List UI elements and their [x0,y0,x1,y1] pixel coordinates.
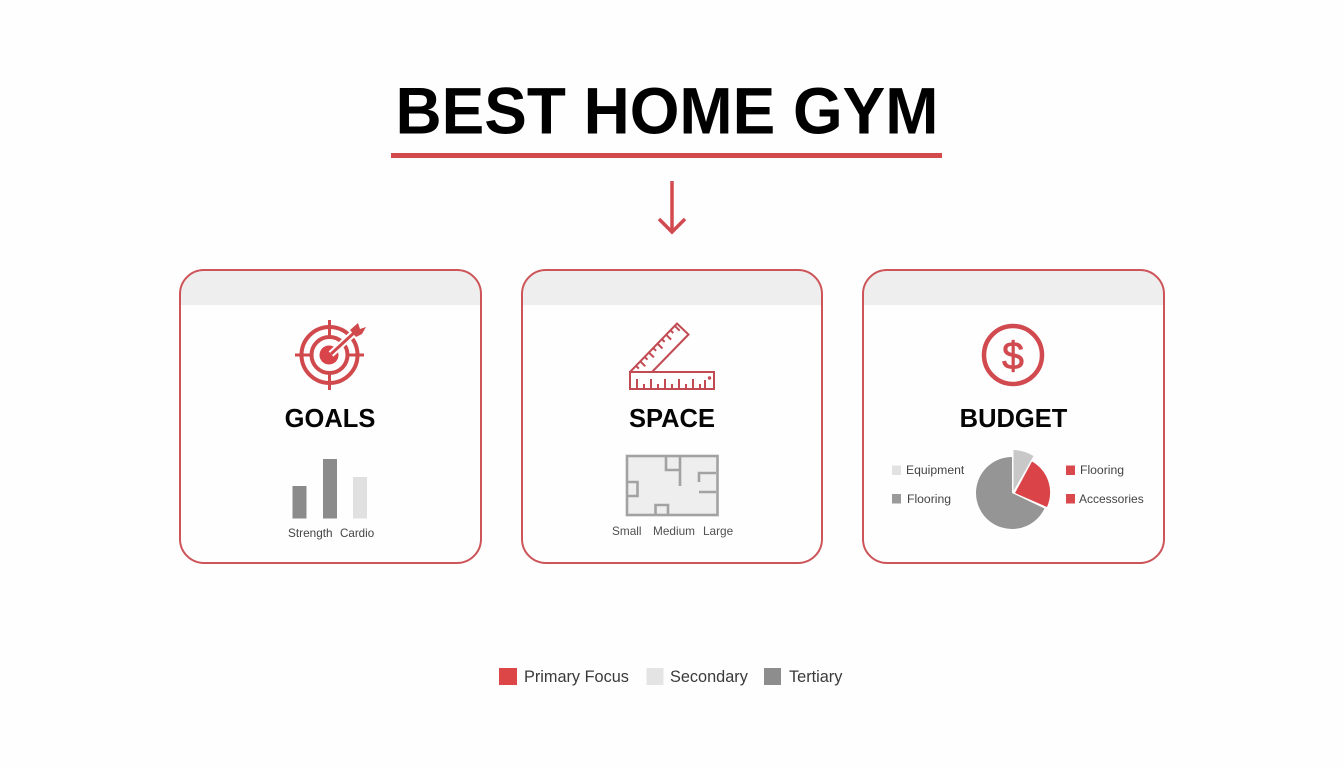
heading: goals: GOALS [285,405,375,433]
floor plan size labels: Small [612,524,642,538]
floor plan size labels: Medium [653,524,695,538]
panel: space [522,270,822,563]
icon: dollar coin [984,326,1042,384]
legend [499,668,843,686]
title: BEST HOME GYM [396,74,938,148]
budget legend: Flooring [907,492,951,506]
budget legend: Accessories [1079,492,1144,506]
title underline [391,153,942,158]
legend: Secondary [670,668,749,686]
panel: budget [863,270,1164,563]
pie chart: budget [976,450,1050,529]
panel header band [522,270,822,305]
heading: space: SPACE [629,405,715,433]
budget legend: Equipment [906,463,965,477]
arrow: down to panels [659,181,685,232]
bar chart: goals: Strength [288,526,333,540]
budget legend [892,463,1144,506]
floor plan size labels [612,524,734,538]
icon: dollar coin: $ [1002,335,1024,378]
heading: budget: BUDGET [960,405,1068,433]
panel header band [863,270,1164,305]
legend: Primary Focus [524,668,629,686]
icon: target with arrow [295,320,366,390]
icon: folding ruler [630,324,714,389]
bar chart: goals: Cardio [340,527,374,540]
budget legend: Flooring [1080,463,1124,477]
legend: Tertiary [789,668,843,686]
floor plan size labels: Large [703,524,734,538]
panel: goals [180,270,481,563]
panel header band [180,270,481,305]
bar chart: goals [288,459,374,540]
floor plan [627,456,718,515]
